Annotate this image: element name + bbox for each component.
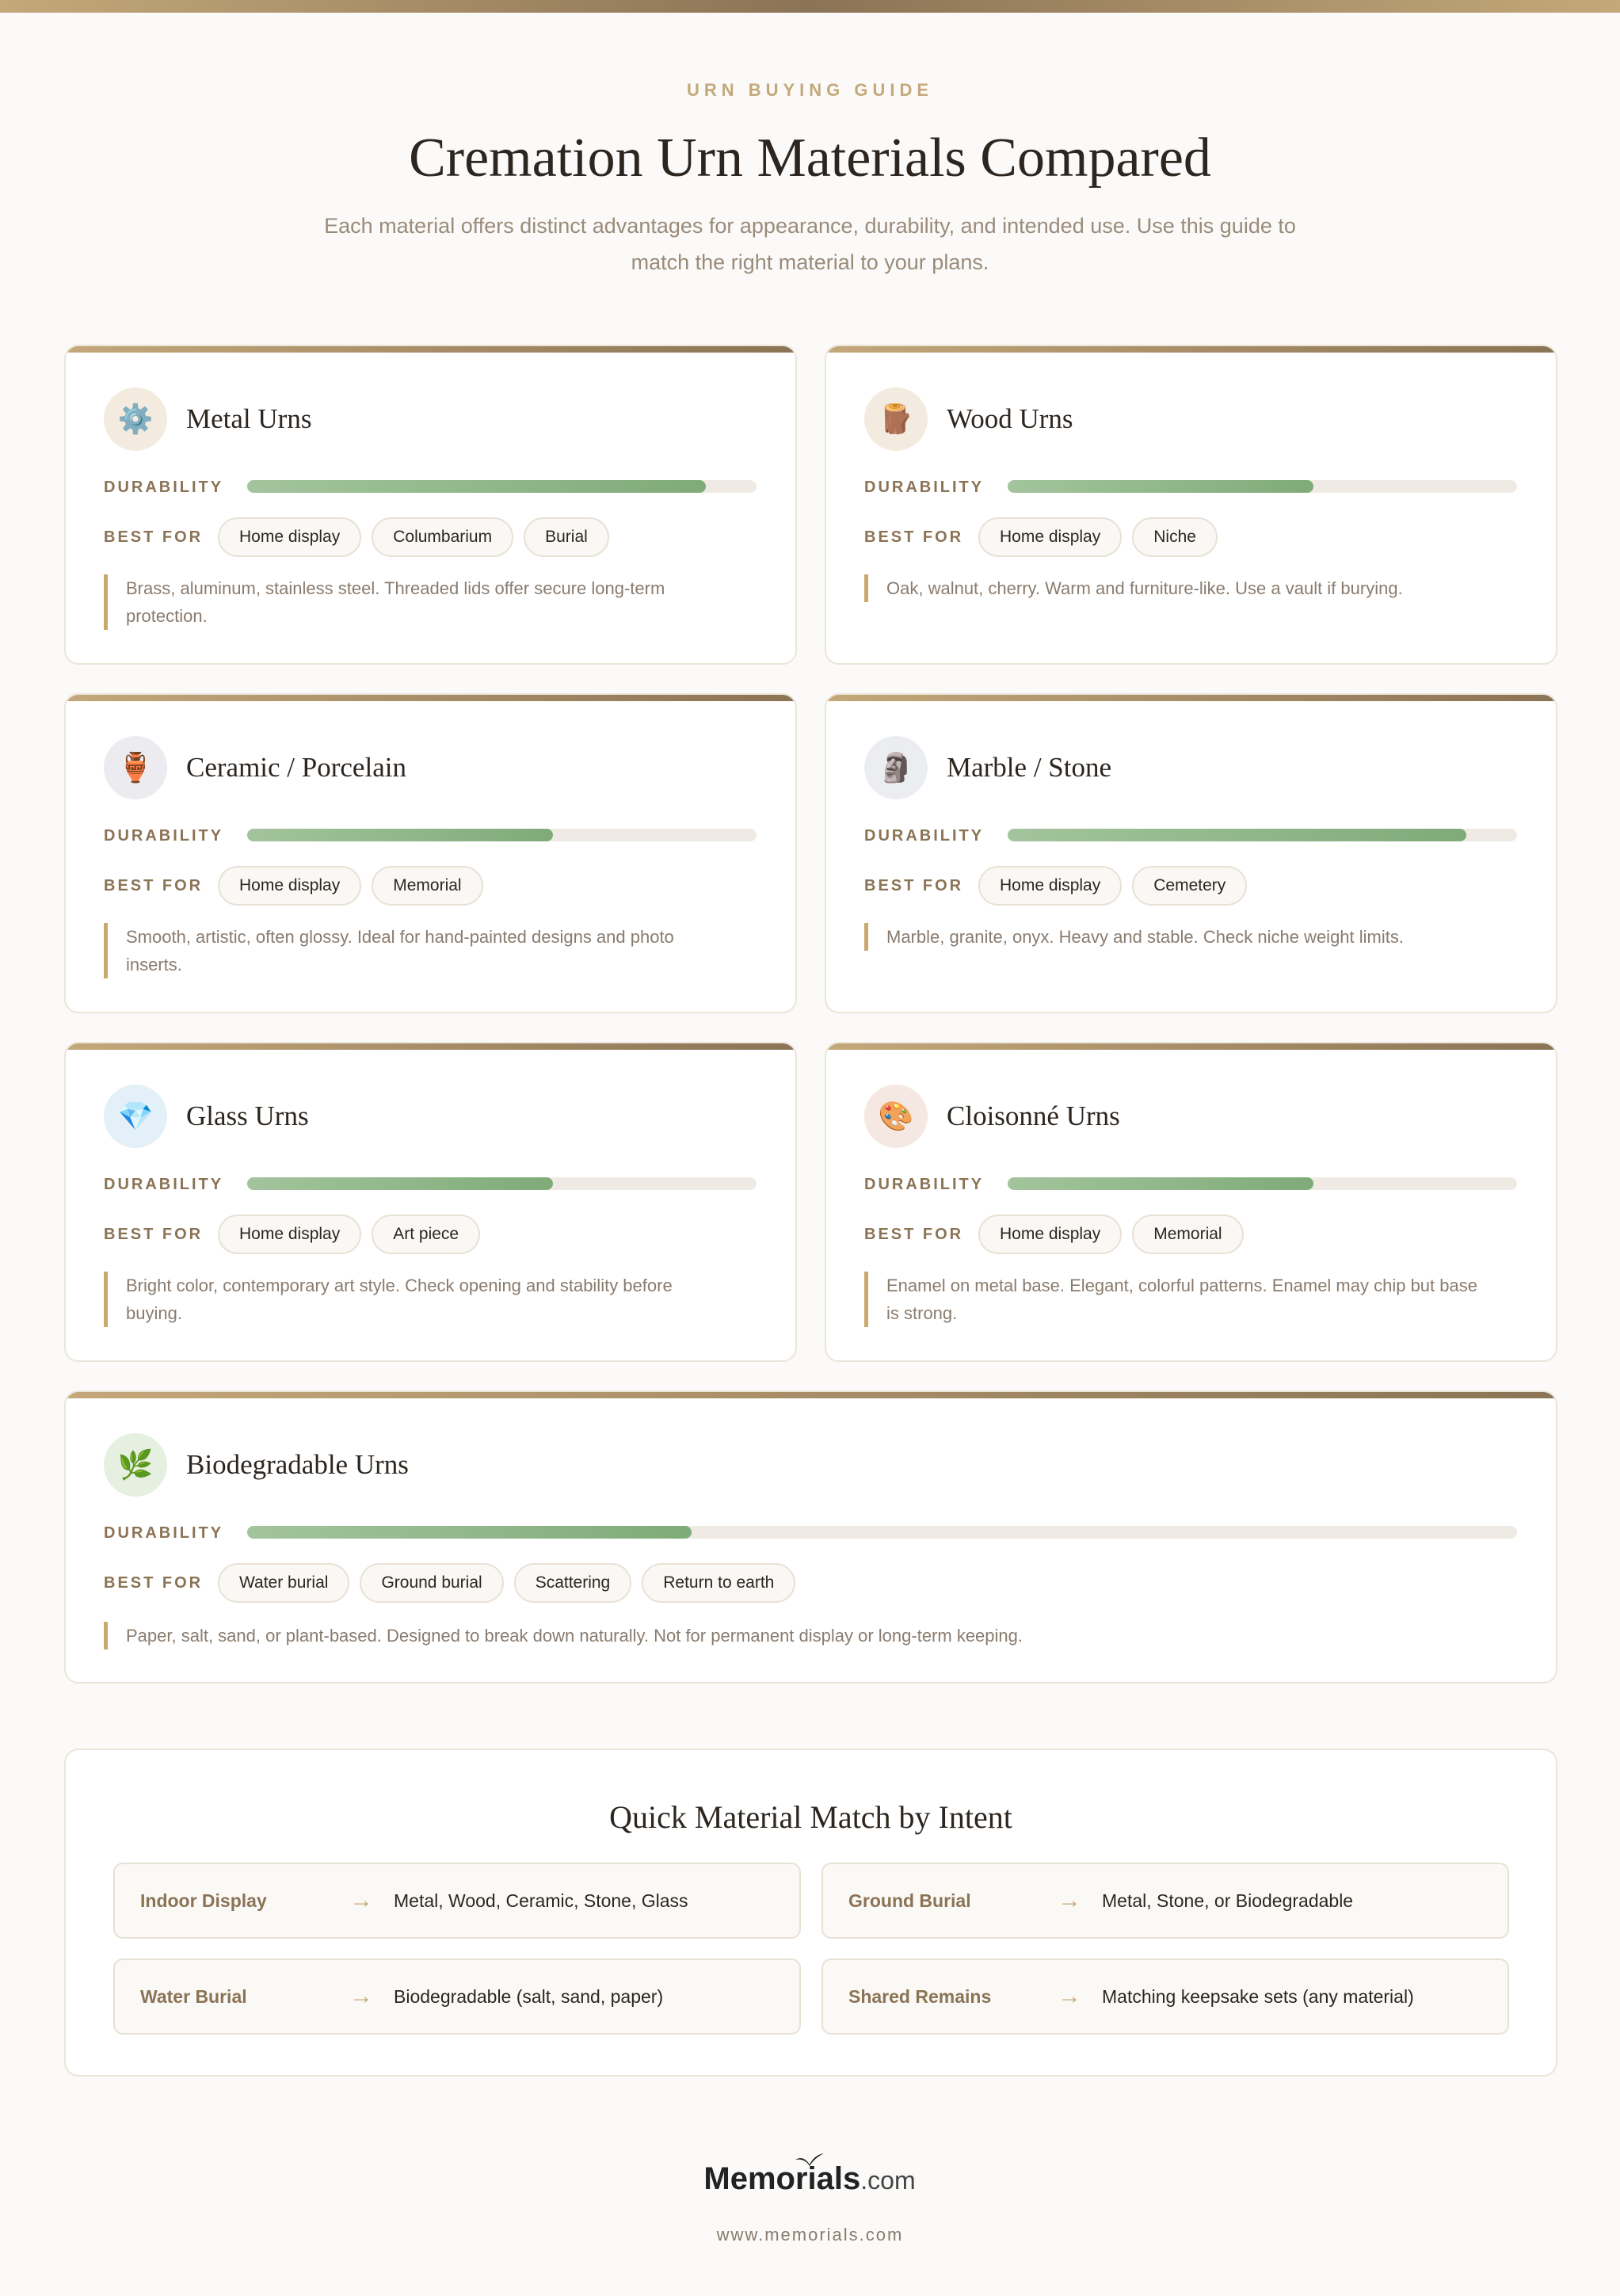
description: Marble, granite, onyx. Heavy and stable. Check niche weight limits.: [886, 927, 1404, 947]
pills: [218, 1563, 795, 1603]
best for label: BEST FOR: [104, 877, 203, 894]
subtitle: [324, 214, 1296, 274]
icon: palette: [864, 1085, 928, 1148]
pills: Home display: [239, 528, 340, 546]
icon: stone: 🗿: [879, 751, 913, 784]
row: shared remains: Matching keepsake sets (any material): [1102, 1986, 1414, 2007]
row: shared remains: Shared Remains: [848, 1986, 991, 2007]
durability bar: [247, 480, 757, 493]
description: Paper, salt, sand, or plant-based. Designed to break down naturally. Not for permanent display or long-term keeping.: [126, 1626, 1023, 1646]
pills: [978, 517, 1218, 557]
panel: metal urns: [64, 345, 797, 665]
description: Bright color, contemporary art style. Check opening and stability before: [126, 1276, 673, 1295]
icon: gem: [104, 1085, 167, 1148]
pills: Home display: [1000, 528, 1100, 546]
heading: marble: Marble / Stone: [947, 752, 1111, 783]
row: ground burial: [821, 1863, 1509, 1939]
description: Oak, walnut, cherry. Warm and furniture-like. Use a vault if burying.: [886, 578, 1403, 598]
best for label: BEST FOR: [864, 528, 963, 546]
best for label: BEST FOR: [104, 528, 203, 546]
durability bar: [1008, 480, 1517, 493]
row: water burial: [113, 1958, 801, 2035]
description: Smooth, artistic, often glossy. Ideal for hand-painted designs and photo: [126, 927, 674, 947]
row: indoor display: Indoor Display: [140, 1890, 267, 1911]
icon: palette: 🎨: [879, 1100, 913, 1133]
durability label: DURABILITY: [864, 1176, 984, 1193]
description: protection.: [126, 606, 208, 626]
subtitle: Each material offers distinct advantages for appearance, durability, and intended use. Use this guide to: [324, 214, 1296, 238]
icon: stone: [864, 736, 928, 799]
description: Enamel on metal base. Elegant, colorful patterns. Enamel may chip but base: [886, 1276, 1477, 1295]
row: indoor display: →: [349, 1887, 373, 1913]
best for label: BEST FOR: [864, 877, 963, 894]
pills: Art piece: [393, 1225, 459, 1243]
description: Brass, aluminum, stainless steel. Threaded lids offer secure long-term: [126, 578, 665, 598]
durability bar: [247, 829, 757, 841]
durability label: DURABILITY: [104, 1524, 223, 1542]
row: ground burial: →: [1058, 1887, 1081, 1913]
icon: amphora: [104, 736, 167, 799]
description: [864, 1272, 1477, 1327]
pills: [218, 1215, 480, 1254]
icon: leaf: 🌿: [118, 1448, 153, 1482]
panel: quick match: [64, 1749, 1557, 2077]
durability bar: [1008, 829, 1517, 841]
pills: [978, 1215, 1244, 1254]
row: ground burial: Metal, Stone, or Biodegradable: [1102, 1890, 1353, 1911]
description: [104, 1272, 673, 1327]
pills: Memorial: [393, 876, 462, 894]
panel: marble: [825, 693, 1557, 1013]
pills: [978, 866, 1247, 906]
decorative top bar: [0, 0, 1620, 13]
row: water burial: →: [349, 1983, 373, 2009]
panel: glass: [64, 1042, 797, 1362]
pills: Ground burial: [381, 1573, 482, 1592]
panel: wood urns: [825, 345, 1557, 665]
icon: gem: 💎: [118, 1100, 153, 1133]
icon: leaf: [104, 1433, 167, 1497]
pills: Memorial: [1153, 1225, 1222, 1243]
durability label: DURABILITY: [104, 827, 223, 845]
pills: Home display: [1000, 1225, 1100, 1243]
logo: Memorials.com: [703, 2161, 916, 2196]
row: water burial: Water Burial: [140, 1986, 247, 2007]
durability label: DURABILITY: [864, 479, 984, 496]
best for label: BEST FOR: [864, 1226, 963, 1243]
description: [104, 1622, 1023, 1650]
row: shared remains: [821, 1958, 1509, 2035]
description: [864, 574, 1403, 602]
description: inserts.: [126, 955, 182, 974]
pills: Scattering: [536, 1573, 610, 1592]
eyebrow: URN BUYING GUIDE: [687, 80, 933, 100]
durability label: DURABILITY: [864, 827, 984, 845]
durability label: DURABILITY: [104, 1176, 223, 1193]
description: buying.: [126, 1303, 182, 1323]
pills: Water burial: [239, 1573, 328, 1592]
pills: Home display: [239, 876, 340, 894]
heading: cloisonne: Cloisonné Urns: [947, 1100, 1120, 1131]
panel: cloisonne: [825, 1042, 1557, 1362]
pills: Home display: [239, 1225, 340, 1243]
pills: Home display: [1000, 876, 1100, 894]
subtitle: match the right material to your plans.: [631, 250, 989, 274]
row: indoor display: [113, 1863, 801, 1939]
row: water burial: Biodegradable (salt, sand, paper): [394, 1986, 663, 2007]
pills: [218, 866, 483, 906]
heading: ceramic: Ceramic / Porcelain: [186, 752, 406, 783]
durability bar: [247, 1526, 1517, 1539]
title: Cremation Urn Materials Compared: [409, 128, 1211, 189]
icon: wood: 🪵: [879, 402, 913, 436]
best for label: BEST FOR: [104, 1574, 203, 1592]
panel: ceramic: [64, 693, 797, 1013]
pills: Burial: [545, 528, 588, 546]
heading: biodegradable: Biodegradable Urns: [186, 1449, 409, 1480]
row: indoor display: Metal, Wood, Ceramic, Stone, Glass: [394, 1890, 688, 1911]
pills: Cemetery: [1153, 876, 1225, 894]
heading: wood: Wood Urns: [947, 403, 1073, 434]
description: [104, 923, 674, 978]
pills: [218, 517, 609, 557]
icon: gear: [104, 387, 167, 451]
description: [104, 574, 665, 630]
durability label: DURABILITY: [104, 479, 223, 496]
best for label: BEST FOR: [104, 1226, 203, 1243]
pills: Columbarium: [393, 528, 492, 546]
panel: biodegradable: [64, 1390, 1557, 1684]
heading: quick match: Quick Material Match by Intent: [609, 1799, 1012, 1835]
heading: glass: Glass Urns: [186, 1100, 309, 1131]
icon: amphora: 🏺: [118, 751, 153, 784]
durability bar: [1008, 1177, 1517, 1190]
pills: Return to earth: [663, 1573, 774, 1592]
heading: metal: Metal Urns: [186, 403, 311, 434]
icon: gear: ⚙️: [118, 402, 153, 436]
row: ground burial: Ground Burial: [848, 1890, 971, 1911]
durability bar: [247, 1177, 757, 1190]
icon: wood: [864, 387, 928, 451]
description: [864, 923, 1404, 951]
url: www.memorials.com: [717, 2225, 903, 2245]
description: is strong.: [886, 1303, 957, 1323]
row: shared remains: →: [1058, 1983, 1081, 2009]
pills: Niche: [1153, 528, 1196, 546]
